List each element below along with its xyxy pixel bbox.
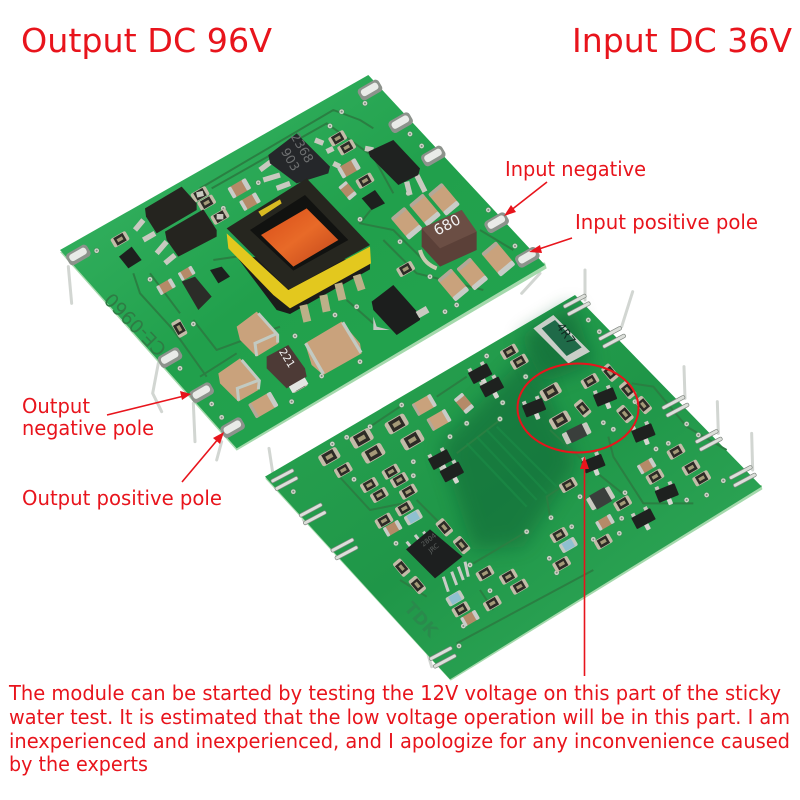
- IC marking second line: 903: [278, 145, 303, 174]
- arrow: input negative: [504, 182, 547, 216]
- pin legs: [68, 267, 540, 460]
- op-amp IC: JRC: [426, 542, 441, 556]
- inductor 221: 221: [276, 346, 298, 370]
- text block: explanation: [8, 681, 790, 776]
- arrow: output positive pole: [182, 432, 224, 482]
- pin legs: [269, 270, 753, 667]
- copper traces: [133, 110, 513, 377]
- board outline: [265, 295, 762, 681]
- small transistors: [426, 360, 681, 535]
- callout: highlighted test area circle: [518, 364, 638, 452]
- label: output negative pole: Output: [22, 394, 90, 418]
- silver pads: [65, 78, 541, 439]
- board outline: [60, 75, 547, 451]
- op-amp IC: 2804: [420, 532, 438, 548]
- op-amp IC: [406, 529, 468, 592]
- dark corner shading: [520, 303, 593, 383]
- label: output negative pole: negative pole: [22, 416, 154, 440]
- transformer: [227, 178, 371, 322]
- text block: explanation: inexperienced and inexperienced, and I apologize for any inconvenience caused: [9, 729, 790, 753]
- title: output voltage: Output DC 96V: [21, 21, 272, 60]
- TDK logo: TDK: [400, 599, 441, 642]
- label: input positive pole: Input positive pole: [575, 210, 758, 234]
- photo: top side of circuit board: [60, 75, 547, 460]
- photo: bottom side of circuit board: [265, 270, 762, 681]
- arrow: test area pointer: [580, 456, 589, 676]
- text block: explanation: water test. It is estimated that the low voltage operation will be in this part. I am: [9, 705, 790, 729]
- label: input negative: Input negative: [505, 157, 646, 181]
- inductor 680: [420, 210, 477, 268]
- shunt resistor 4R7: [533, 315, 590, 363]
- text block: explanation: The module can be started by testing the 12V voltage on this part of the sticky: [8, 681, 781, 705]
- silver pin pads: [270, 294, 757, 669]
- SMD capacitors: [383, 392, 657, 627]
- text block: explanation: by the experts: [9, 752, 148, 776]
- label: output positive pole: Output positive pole: [22, 486, 222, 510]
- via holes: [94, 101, 518, 420]
- shaded copper area: [440, 350, 577, 550]
- copper traces: [333, 377, 727, 643]
- SMD resistors: [317, 343, 712, 618]
- board marking: CE-0960: [101, 288, 171, 360]
- title: input voltage: Input DC 36V: [572, 21, 792, 60]
- IC marking: 2368: [288, 130, 317, 165]
- inductor 680: 680: [431, 211, 464, 239]
- grey diodes: [561, 422, 616, 511]
- black ICs: [119, 133, 429, 335]
- large capacitors: [218, 312, 362, 402]
- shunt resistor 4R7: 4R7: [553, 320, 578, 347]
- arrow: input positive pole: [529, 238, 572, 253]
- label: output negative pole: [22, 394, 154, 440]
- inductor 221: [267, 345, 308, 393]
- ceramic capacitors: [156, 158, 515, 419]
- arrow: output negative pole: [107, 391, 191, 415]
- small resistors: [110, 130, 416, 394]
- via holes: [291, 317, 726, 649]
